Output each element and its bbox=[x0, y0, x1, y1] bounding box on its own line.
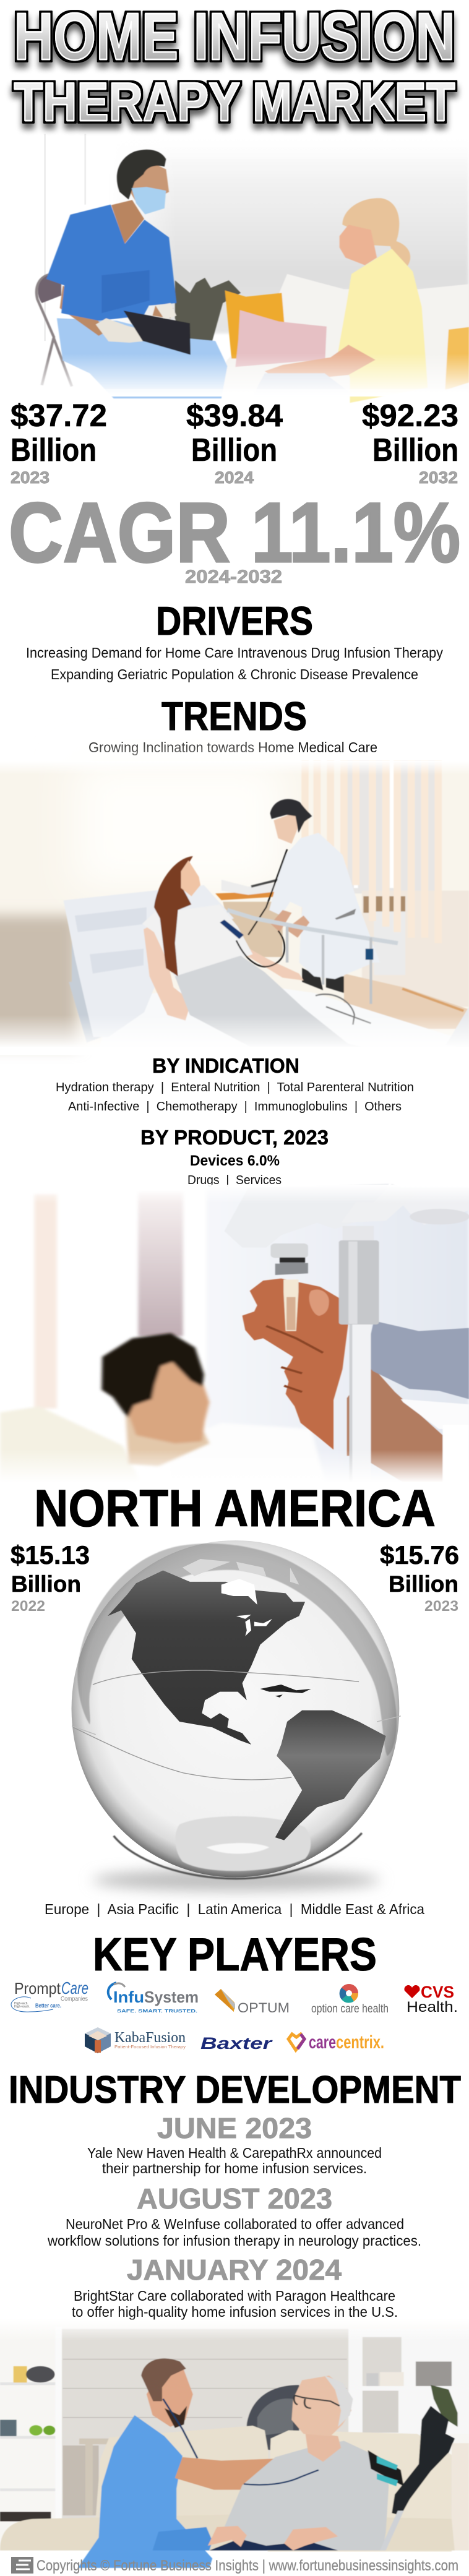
value 2022: $15.13 bbox=[11, 1540, 90, 1569]
woman face bbox=[340, 225, 377, 265]
glass bottom bbox=[175, 1816, 311, 1871]
footer logo bbox=[11, 2557, 33, 2574]
clipboard bbox=[124, 311, 191, 355]
right shelves bbox=[348, 2329, 469, 2434]
stat 2023 bbox=[11, 398, 107, 487]
blinds bbox=[305, 761, 438, 943]
cuff bbox=[401, 1399, 469, 1429]
woman jeans bbox=[252, 373, 355, 396]
hand bbox=[243, 1279, 348, 1449]
patient neck bbox=[126, 1415, 209, 1466]
arctic islands bbox=[183, 1559, 299, 1585]
patient pants bbox=[209, 2539, 338, 2551]
nurse pants bbox=[57, 318, 227, 398]
sofa seat bbox=[0, 2514, 455, 2551]
pole bbox=[350, 1323, 371, 1483]
logo: KabaFusion: KabaFusion bbox=[114, 2030, 186, 2046]
chair bbox=[247, 2385, 299, 2450]
patient head bbox=[291, 2376, 351, 2436]
orange pillow bbox=[225, 290, 285, 359]
stethoscope bbox=[163, 2399, 319, 2485]
by product heading: BY PRODUCT, 2023 bbox=[140, 1126, 329, 1149]
pink pillow bbox=[235, 310, 327, 367]
logo: CVS Health: Health. bbox=[407, 1999, 458, 2016]
patient hair bbox=[154, 856, 193, 976]
logo: Baxter: Baxter bbox=[200, 2034, 273, 2053]
sofa back left bbox=[96, 2426, 269, 2521]
stat 2023: $37.72 bbox=[11, 398, 107, 433]
nurse arm bbox=[175, 2457, 324, 2490]
value 2022 bbox=[11, 1540, 90, 1615]
crutches bbox=[368, 2450, 404, 2486]
sofa back right bbox=[268, 2431, 452, 2551]
desk bbox=[79, 2439, 112, 2515]
patient pants bbox=[175, 956, 366, 1048]
pole clamp bbox=[339, 1240, 379, 1324]
patient hair bbox=[101, 1333, 204, 1418]
curtain bbox=[138, 1192, 183, 1336]
patient face bbox=[181, 861, 200, 896]
bed frame bbox=[69, 932, 101, 1042]
value 2023: $15.76 bbox=[380, 1540, 459, 1569]
nurse scrubs bbox=[46, 205, 176, 320]
key player logos bbox=[11, 1978, 458, 2053]
development: June 2023 bbox=[87, 2112, 382, 2176]
logo: InfuSystem: SAFE. SMART. TRUSTED. bbox=[117, 2008, 197, 2014]
BP cuff bbox=[220, 920, 244, 939]
window bbox=[344, 761, 437, 893]
devices share: Devices 6.0% bbox=[190, 1153, 280, 1169]
patient hands bbox=[208, 2526, 338, 2551]
bottle cap bbox=[275, 1258, 308, 1275]
logo: PromptCare: Companies bbox=[61, 1996, 88, 2003]
development: June 2023: JUNE 2023 bbox=[157, 2112, 312, 2144]
development: June 2023: their partnership for home infusion services. bbox=[102, 2160, 367, 2176]
value 2022: 2022 bbox=[11, 1598, 45, 1615]
logo: KabaFusion bbox=[85, 2027, 186, 2053]
logo: KabaFusion: Patient-Focused Infusion Therapy bbox=[114, 2044, 186, 2050]
by indication list: Hydration therapy | Enteral Nutrition | Total Parenteral Nutrition bbox=[56, 1080, 414, 1094]
stat 2032 bbox=[362, 398, 458, 487]
iv bag bbox=[225, 1183, 389, 1248]
stat 2032: $92.23 bbox=[362, 398, 458, 433]
woman shirt bbox=[338, 249, 428, 403]
logo: CVS Health bbox=[404, 1983, 458, 2016]
wall bbox=[61, 2329, 348, 2520]
patient face bbox=[127, 1357, 209, 1443]
nurse head bbox=[147, 2364, 193, 2427]
glove bbox=[96, 318, 160, 343]
stat 2032: Billion bbox=[372, 432, 458, 468]
drivers text: Increasing Demand for Home Care Intravenous Drug Infusion Therapy bbox=[26, 645, 443, 661]
development: January 2024: to offer high-quality home infusion services in the U.S. bbox=[72, 2304, 398, 2320]
glasses bbox=[294, 2395, 340, 2408]
globe shadow bbox=[93, 1870, 380, 1891]
development: August 2023 bbox=[47, 2183, 421, 2249]
bed rail bbox=[227, 910, 398, 943]
desk with equipment bbox=[215, 891, 284, 900]
logo: Optum bbox=[215, 1989, 290, 2016]
patient arm bbox=[144, 921, 191, 1021]
logo: PromptCare: Better care. bbox=[35, 2003, 61, 2009]
by indication list bbox=[56, 1080, 414, 1114]
logo: Option Care Health: option care health bbox=[311, 2003, 389, 2016]
development: January 2024 bbox=[72, 2254, 398, 2320]
sleeve bbox=[364, 1321, 469, 1399]
value 2023: Billion bbox=[389, 1571, 458, 1597]
woman arm bbox=[265, 345, 376, 381]
cushion right bbox=[445, 327, 469, 390]
globe bbox=[72, 1540, 401, 1891]
trends text: Growing Inclination towards Home Medical Care bbox=[88, 739, 377, 755]
doctor face bbox=[273, 812, 298, 844]
patient neck bbox=[305, 2431, 341, 2462]
bottle neck bbox=[270, 1243, 308, 1258]
drip chamber bbox=[283, 1279, 298, 1331]
logo: Option Care Health bbox=[311, 1984, 389, 2016]
nurse face bbox=[130, 161, 169, 207]
CAGR: 2024-2032 bbox=[185, 567, 282, 587]
photo: nurse with patient on sofa bbox=[0, 131, 469, 403]
market size stats bbox=[11, 398, 458, 487]
logo: PromptCare: Care bbox=[61, 1978, 88, 1998]
logo: PromptCare: High-tech. bbox=[14, 2002, 28, 2006]
drivers text: Expanding Geriatric Population & Chronic Disease Prevalence bbox=[51, 666, 418, 682]
radiator bbox=[374, 911, 405, 975]
stat 2032: 2032 bbox=[419, 468, 458, 487]
nurse mask bbox=[132, 187, 166, 215]
south america bbox=[275, 1711, 386, 1840]
title bbox=[14, 0, 455, 132]
hudson bay bbox=[222, 1579, 257, 1605]
stat 2024: $39.84 bbox=[186, 398, 283, 433]
drivers text bbox=[26, 645, 443, 682]
chair bbox=[37, 274, 72, 387]
bed bbox=[99, 982, 455, 1048]
logo: CVS Health: CVS bbox=[421, 1983, 454, 2001]
trends heading: TRENDS bbox=[161, 693, 307, 739]
doctor coat bbox=[269, 833, 380, 979]
north america bbox=[108, 1570, 305, 1745]
value 2023: 2023 bbox=[424, 1598, 458, 1615]
pillow bbox=[0, 1406, 140, 1483]
north america stats bbox=[11, 1540, 459, 1615]
patient sweater bbox=[225, 2441, 389, 2551]
by indication heading: BY INDICATION bbox=[152, 1054, 299, 1077]
stat 2023: 2023 bbox=[11, 468, 49, 487]
value 2022: Billion bbox=[11, 1571, 81, 1597]
nurse neck bbox=[111, 200, 144, 244]
stat 2023: Billion bbox=[11, 432, 97, 468]
logo: CareCentrix: care bbox=[309, 2032, 336, 2053]
doctor hands bbox=[270, 910, 309, 938]
logo: PromptCare: Prompt bbox=[14, 1979, 61, 1998]
development: January 2024: BrightStar Care collaborated with Paragon Healthcare bbox=[74, 2288, 395, 2304]
photo: IV drip held by a clinician, patient in background bbox=[0, 1183, 469, 1496]
key players heading: KEY PLAYERS bbox=[93, 1928, 377, 1980]
floor bbox=[344, 974, 469, 1029]
product list: Drugs | Services bbox=[187, 1173, 282, 1187]
regions list: Europe | Asia Pacific | Latin America | Middle East & Africa bbox=[45, 1901, 424, 1917]
logo: InfuSystem: Infu bbox=[113, 1988, 144, 2006]
development: January 2024: JANUARY 2024 bbox=[127, 2254, 342, 2286]
by indication list: Anti-Infective | Chemotherapy | Immunoglobulins | Others bbox=[68, 1099, 402, 1114]
development: August 2023: AUGUST 2023 bbox=[137, 2183, 332, 2215]
logo: InfuSystem: System bbox=[144, 1988, 199, 2006]
glass sphere bbox=[72, 1540, 399, 1878]
logo: PromptCare bbox=[11, 1978, 88, 2012]
blanket bbox=[171, 1423, 326, 1485]
stat 2024: 2024 bbox=[215, 468, 254, 487]
development: June 2023: Yale New Haven Health & CarepathRx announced bbox=[87, 2145, 382, 2161]
caribbean bbox=[260, 1685, 311, 1698]
logo: CareCentrix bbox=[288, 2032, 384, 2053]
doctor legs bbox=[302, 968, 344, 993]
footer bbox=[11, 2557, 458, 2574]
logo: InfuSystem bbox=[108, 1983, 199, 2014]
value 2023 bbox=[380, 1540, 459, 1615]
development: August 2023: workflow solutions for infusion therapy in neurology practices. bbox=[47, 2233, 421, 2249]
logo: CareCentrix: centrix. bbox=[336, 2032, 384, 2053]
nurse hair bbox=[117, 150, 166, 199]
photo: doctor checking blood pressure of patient in bed bbox=[0, 761, 469, 1055]
wall under window bbox=[362, 891, 469, 1007]
left shelves bbox=[0, 2384, 61, 2490]
logo: Optum: OPTUM bbox=[238, 2000, 290, 2016]
great lakes bbox=[236, 1615, 272, 1636]
plant bbox=[175, 278, 241, 364]
pillow bbox=[63, 885, 234, 1037]
woman hair bbox=[342, 198, 410, 269]
sofa bbox=[209, 274, 469, 393]
north america heading: NORTH AMERICA bbox=[34, 1479, 436, 1537]
stat 2024: Billion bbox=[191, 432, 277, 468]
logo: PromptCare: High-touch. bbox=[14, 2005, 30, 2009]
doctor hair bbox=[270, 799, 312, 833]
stat 2024 bbox=[186, 398, 283, 487]
development: August 2023: NeuroNet Pro & WeInfuse collaborated to offer advanced bbox=[66, 2216, 404, 2232]
stethoscope and tube bbox=[236, 849, 287, 967]
arm bbox=[347, 1365, 442, 1483]
photo: nurse examining elderly man on sofa bbox=[0, 2320, 469, 2568]
nurse arm bbox=[60, 285, 108, 336]
drivers heading: DRIVERS bbox=[156, 598, 313, 643]
patient shirt bbox=[142, 904, 252, 979]
nurse scrubs bbox=[78, 2415, 212, 2568]
equator lines bbox=[73, 1670, 359, 1780]
